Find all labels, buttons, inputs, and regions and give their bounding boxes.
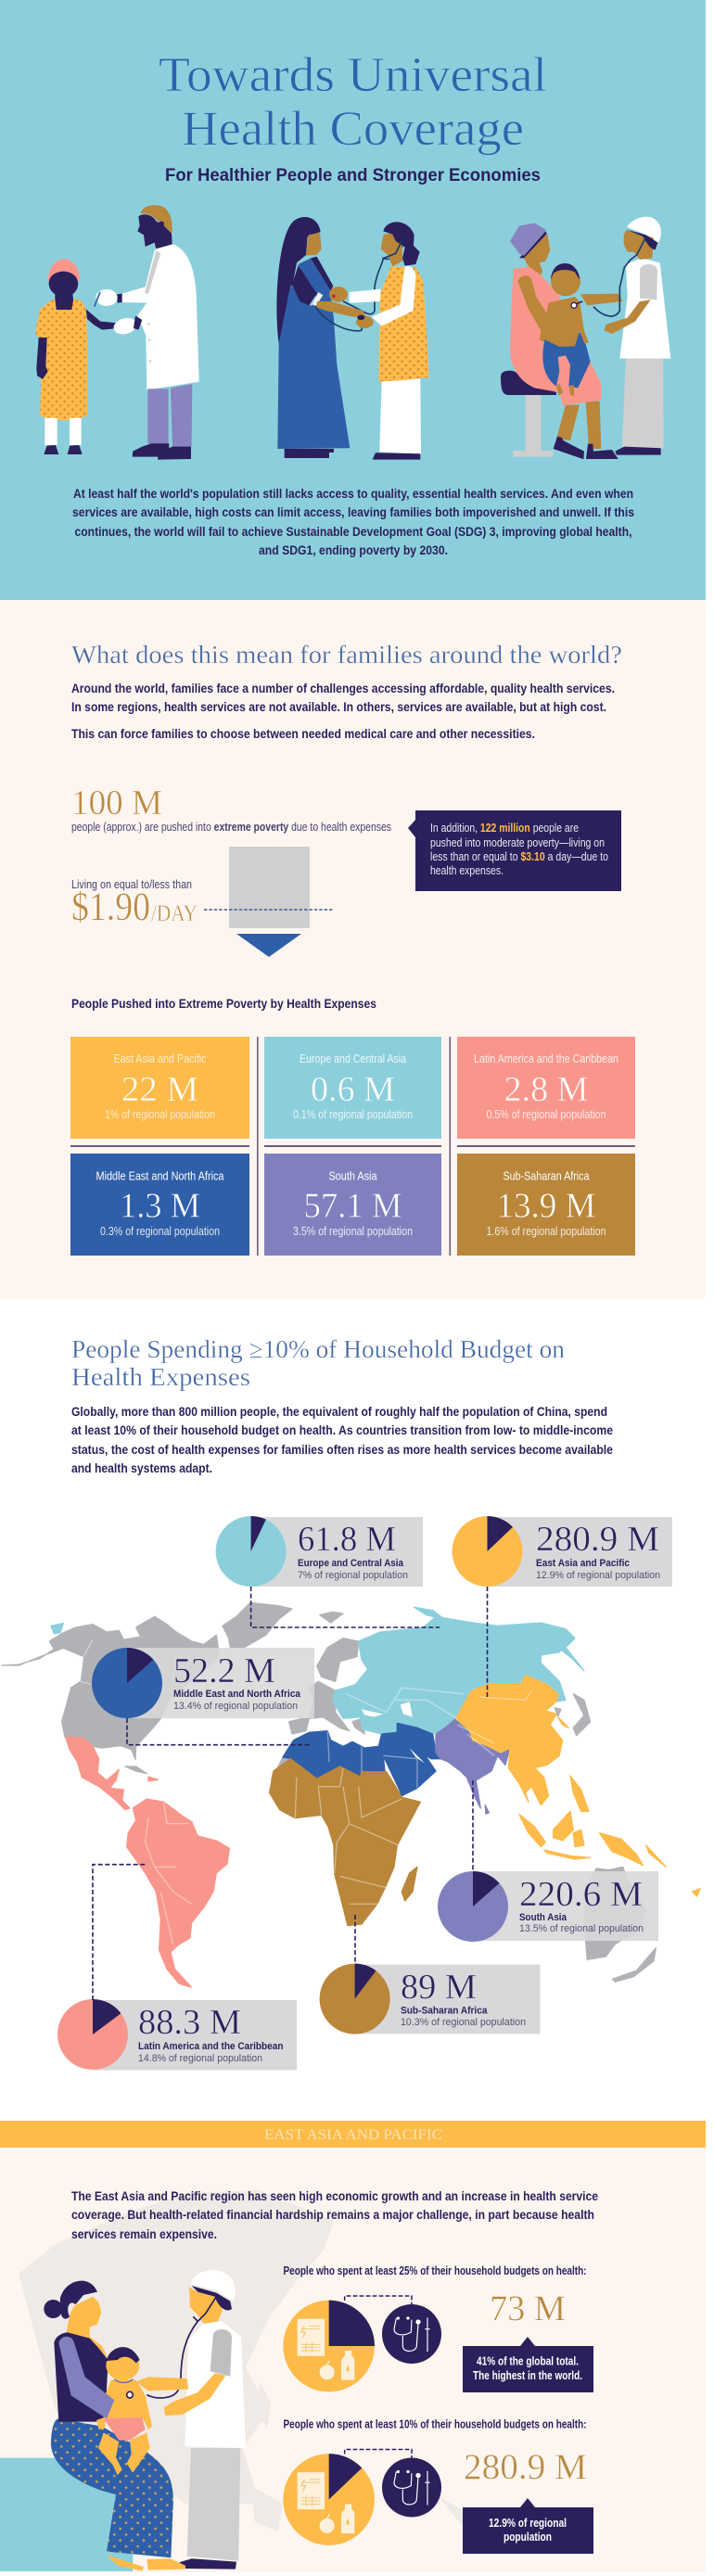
title: Towards Universal (159, 48, 547, 102)
callout: Middle East and North Africa: 13.4% of regional population (173, 1701, 298, 1712)
banner: East Asia and Pacific: EAST ASIA AND PACIFIC (264, 2127, 442, 2143)
stat: 280.9 M: 280.9 M (464, 2447, 587, 2487)
callout: South Asia: 220.6 M (519, 1875, 643, 1914)
callout: East Asia and Pacific: East Asia and Pacific (536, 1558, 630, 1569)
panel: East Asia and Pacific background (0, 2148, 706, 2572)
text block: families face challenges: In some regions, health services are not available. In others, services are available, but at high cost. (71, 699, 606, 714)
illustration: mother, baby and doctor (0, 2270, 246, 2571)
callout: Middle East and North Africa: Middle East and North Africa (173, 1689, 301, 1700)
panel: East Asia and Pacific card: 22 M (121, 1070, 198, 1109)
text block: header intro: At least half the world's population still lacks access to quality, essential health services. And even when (73, 486, 633, 501)
text block: more than 800 million: and health systems adapt. (71, 1460, 212, 1475)
illustration: child receiving injection from doctor (35, 205, 199, 460)
callout: 122 million moderate poverty: health expenses. (430, 864, 504, 877)
map leader lines (93, 1587, 488, 2000)
stat: 100 M pushed into extreme poverty: 100 M (71, 784, 162, 823)
banner: East Asia and Pacific (0, 2121, 706, 2148)
panel: Middle East and North Africa card (70, 1154, 249, 1256)
title (159, 48, 547, 156)
callout: Sub-Saharan Africa: 89 M (401, 1968, 477, 2007)
callout: 122 million moderate poverty (408, 810, 621, 891)
panel: Sub-Saharan Africa card: Sub-Saharan Africa (503, 1170, 590, 1183)
panel: South Asia card: South Asia (328, 1170, 377, 1183)
panel: what does this mean background (0, 600, 706, 1298)
callout: Sub-Saharan Africa: Sub-Saharan Africa (401, 2005, 488, 2016)
callout: 41 percent of the global total: 41% of the global total. (477, 2354, 579, 2368)
stat: 73 M: 73 M (490, 2289, 566, 2328)
panel: East Asia and Pacific card: 1% of regional population (105, 1108, 215, 1121)
callout: Latin America and the Caribbean: 14.8% of regional population (138, 2053, 262, 2064)
text block: header intro: and SDG1, ending poverty by 2030. (259, 542, 448, 557)
text block: header intro: services are available, high costs can limit access, leaving families both impoverished and unwell. If this (72, 504, 634, 519)
text block: families face challenges: Around the world, families face a number of challenges accessing affordable, quality health services. (71, 681, 615, 695)
callout: 12.9 percent of regional population: 12.9% of regional (489, 2516, 567, 2530)
stat: 100 M pushed into extreme poverty (71, 784, 391, 834)
panel: Sub-Saharan Africa card: 1.6% of regional population (486, 1225, 606, 1238)
text block: more than 800 million: at least 10% of their household budget on health. As countries transition from low- to middle-income (71, 1422, 613, 1437)
map: Middle East and North Africa (283, 1723, 440, 1796)
stat: living on $1.90 a day (71, 877, 198, 929)
panel: Europe and Central Asia card: Europe and Central Asia (300, 1052, 406, 1065)
stat: 100 M pushed into extreme poverty: people (approx.) are pushed into extreme poverty due to health expenses (71, 820, 391, 834)
world map (2, 1602, 700, 1987)
callout: 41 percent of the global total: The highest in the world. (473, 2368, 582, 2382)
subtitle: For Healthier People and Stronger Economies (165, 166, 541, 185)
map: East Asia and Pacific (456, 1676, 700, 1896)
text block: families face challenges: This can force families to choose between needed medical care and other necessities. (71, 726, 535, 741)
chart: poverty line graphic with arrow (204, 847, 334, 957)
illustration: mother, child and doctor with stethoscope (501, 217, 670, 459)
stat: living on $1.90 a day: /DAY (151, 901, 198, 926)
panel: Europe and Central Asia card: 0.6 M (311, 1070, 395, 1109)
callout: Europe and Central Asia: Europe and Central Asia (298, 1558, 404, 1569)
callout: Europe and Central Asia: 7% of regional population (298, 1570, 408, 1581)
callout: Europe and Central Asia: 61.8 M (298, 1520, 396, 1559)
map: Latin America and the Caribbean (66, 1737, 229, 1987)
callout: Sub-Saharan Africa: 10.3% of regional population (401, 2017, 526, 2028)
text block: header intro (72, 486, 634, 557)
callout: South Asia (438, 1871, 658, 1942)
map: Sub-Saharan Africa (270, 1759, 420, 1926)
callout: Europe and Central Asia (216, 1516, 423, 1587)
panel: Middle East and North Africa card: Middle East and North Africa (96, 1170, 224, 1183)
callout: Latin America and the Caribbean (57, 1999, 297, 2070)
text block: families face challenges (71, 681, 615, 741)
map: country borders (81, 1639, 531, 1945)
text block: 25 percent heading: People who spent at least 25% of their household budgets on health: (284, 2264, 586, 2277)
panel: Europe and Central Asia card: 0.1% of regional population (293, 1108, 413, 1121)
panel: Sub-Saharan Africa card (457, 1154, 635, 1256)
arrow: falling into poverty (236, 934, 301, 957)
callout: East Asia and Pacific: 280.9 M (536, 1520, 659, 1559)
title: Health Coverage (182, 102, 524, 156)
heading: people spending 10 percent: People Spending ≥10% of Household Budget on (71, 1335, 565, 1363)
callout: East Asia and Pacific: 12.9% of regional population (536, 1570, 660, 1581)
callout: Latin America and the Caribbean: 88.3 M (138, 2003, 241, 2042)
panel: South Asia card (264, 1154, 441, 1256)
callout: South Asia: 13.5% of regional population (519, 1923, 644, 1934)
panel: Latin America and the Caribbean card: Latin America and the Caribbean (474, 1052, 618, 1065)
chart: 10 percent pie with health icon (283, 2449, 441, 2545)
heading: people pushed into extreme poverty: People Pushed into Extreme Poverty by Health Expenses (71, 996, 376, 1011)
callout: 122 million moderate poverty: pushed into moderate poverty—living on (430, 836, 605, 849)
text block: East Asia and Pacific summary: The East Asia and Pacific region has seen high economic growth and an increase in health service (71, 2188, 598, 2203)
text block: East Asia and Pacific summary (71, 2188, 598, 2241)
text block: more than 800 million: Globally, more than 800 million people, the equivalent of roughly half the population of China, spend (71, 1404, 607, 1419)
panel: South Asia card: 57.1 M (304, 1187, 402, 1226)
heading: what does this mean: What does this mean for families around the world? (71, 641, 622, 669)
panel: Latin America and the Caribbean card: 0.5% of regional population (486, 1108, 606, 1121)
chart: 25 percent pie with health icon (283, 2296, 441, 2391)
text block: East Asia and Pacific summary: coverage. But health-related financial hardship remains a major challenge, in part because health (71, 2207, 594, 2222)
panel: Europe and Central Asia card (264, 1037, 441, 1139)
map: inland seas (362, 1702, 413, 1717)
map: Europe and Central Asia (51, 1607, 584, 1734)
illustration: woman and nurse with blood pressure cuff (276, 217, 429, 460)
heading: people spending 10 percent (71, 1335, 565, 1391)
text block: 10 percent heading: People who spent at least 10% of their household budgets on health: (284, 2417, 586, 2431)
callout: 122 million moderate poverty: less than or equal to $3.10 a day—due to (430, 850, 608, 863)
map: other high income regions (2, 1602, 656, 1982)
panel: East Asia and Pacific card (70, 1037, 249, 1139)
text block: more than 800 million: status, the cost of health expenses for families often rises as more health services become available (71, 1442, 613, 1457)
callout: East Asia and Pacific (453, 1516, 672, 1587)
callout: 122 million moderate poverty: In addition, 122 million people are (430, 822, 579, 835)
callout: South Asia: South Asia (519, 1912, 567, 1923)
panel: Latin America and the Caribbean card: 2.8 M (504, 1070, 588, 1109)
callout: 12.9 percent of regional population: population (504, 2530, 552, 2544)
panel: Sub-Saharan Africa card: 13.9 M (497, 1187, 595, 1226)
heading: people spending 10 percent: Health Expenses (71, 1363, 250, 1391)
callout: Sub-Saharan Africa (320, 1964, 540, 2034)
callout: 41 percent of the global total (463, 2337, 593, 2392)
stat: living on $1.90 a day: Living on equal to/less than (71, 877, 192, 891)
text block: more than 800 million (71, 1404, 613, 1475)
stat: living on $1.90 a day: $1.90 (71, 886, 150, 929)
panel: South Asia card: 3.5% of regional population (293, 1225, 413, 1238)
callout: 12.9 percent of regional population (463, 2498, 593, 2554)
callout: Latin America and the Caribbean: Latin America and the Caribbean (138, 2041, 284, 2052)
grid dividers (70, 1037, 635, 1256)
panel: East Asia and Pacific card: East Asia and Pacific (113, 1052, 206, 1065)
text block: East Asia and Pacific summary: services remain expensive. (71, 2226, 217, 2241)
callout: Middle East and North Africa: 52.2 M (173, 1651, 275, 1690)
background map: East Asia (19, 2190, 482, 2531)
panel: Latin America and the Caribbean card (457, 1037, 635, 1139)
callout: Middle East and North Africa (92, 1648, 314, 1718)
map: South Asia (436, 1718, 510, 1814)
text block: header intro: continues, the world will fail to achieve Sustainable Development Goal (SDG) 3, improving global health, (74, 524, 632, 539)
panel: Middle East and North Africa card: 0.3% of regional population (100, 1225, 220, 1238)
panel: header background (0, 0, 706, 600)
panel: Middle East and North Africa card: 1.3 M (120, 1187, 200, 1226)
